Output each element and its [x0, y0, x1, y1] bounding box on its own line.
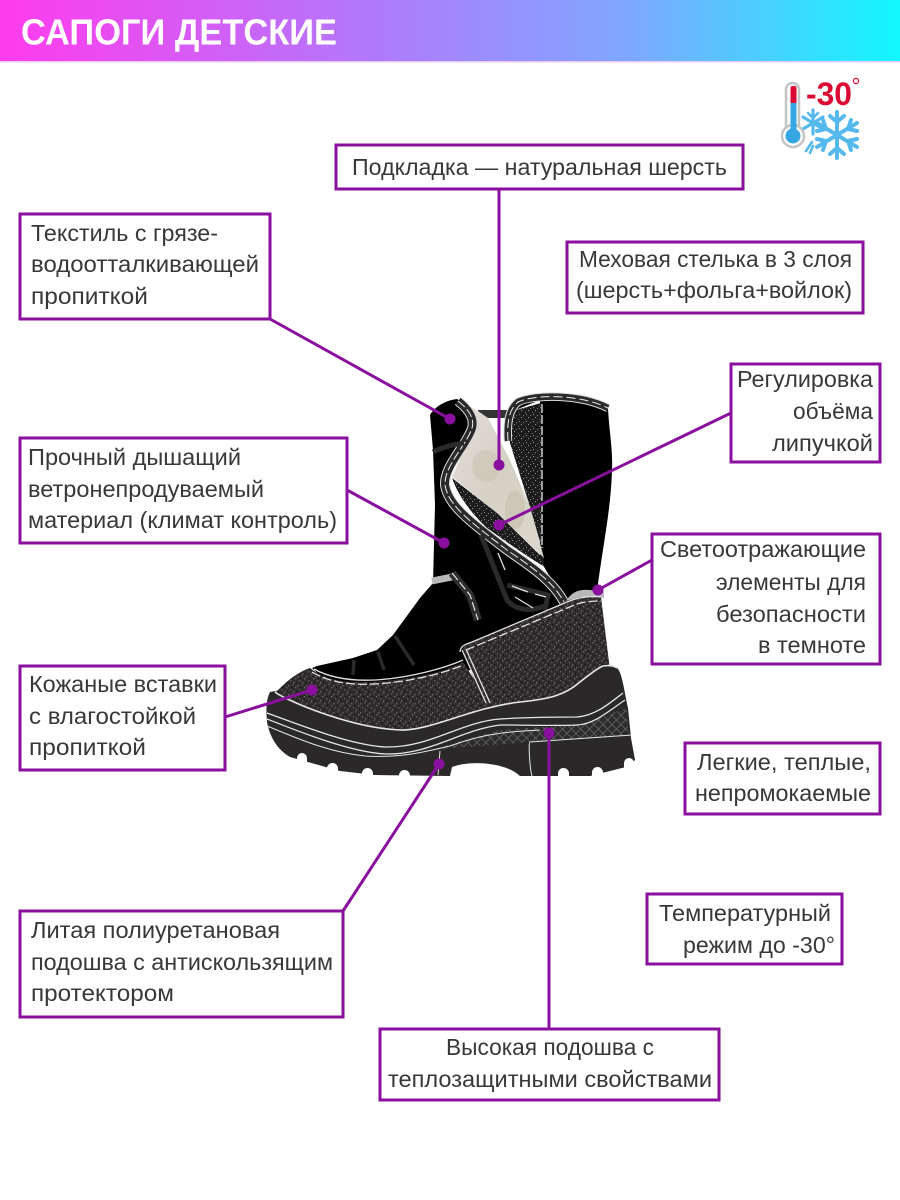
fur lining — [452, 399, 544, 558]
reflective strip left — [432, 577, 452, 581]
callout: breathable material — [20, 438, 347, 543]
callout: temperature range: режим до -30° — [683, 932, 835, 958]
callout: breathable material: Прочный дышащий — [28, 444, 241, 470]
callout: light and warm: Легкие, теплые, — [697, 749, 871, 775]
callout: reflective elements: в темноте — [758, 632, 866, 658]
callout: polyurethane sole: подошва с антискользящим — [31, 949, 333, 975]
callout: high sole: теплозащитными свойствами — [388, 1066, 712, 1092]
collar band — [478, 410, 508, 418]
callout: leather inserts — [20, 666, 225, 770]
sole mesh insert — [423, 708, 629, 752]
reflective strip right — [566, 590, 604, 601]
callout: insole: Меховая стелька в 3 слоя — [579, 246, 852, 272]
callout: light and warm: непромокаемые — [695, 780, 871, 806]
tread notches — [297, 753, 634, 784]
callout: textile: Текстиль с грязе- — [31, 220, 218, 246]
callout: temperature range: Температурный — [659, 900, 831, 926]
callout: textile — [20, 214, 270, 319]
callout: polyurethane sole: Литая полиуретановая — [31, 917, 280, 943]
header banner — [0, 0, 900, 62]
callout: velcro: Регулировка — [737, 366, 873, 392]
inner felt flap — [452, 478, 544, 566]
title: САПОГИ ДЕТСКИЕ — [21, 12, 337, 52]
temperature label: -30 — [806, 76, 852, 112]
callout: leather inserts: Кожаные вставки — [29, 671, 217, 697]
strap — [452, 573, 478, 620]
flap edge binding — [445, 401, 564, 602]
callout: temperature range — [647, 894, 842, 964]
sole highlights — [267, 666, 632, 776]
leader lines and markers — [225, 189, 731, 1029]
callout: high sole: Высокая подошва с — [446, 1034, 654, 1060]
callout: velcro: липучкой — [772, 430, 873, 456]
felt vamp — [463, 597, 610, 722]
callout: lining: Подкладка — натуральная шерсть — [352, 154, 727, 180]
boot shaft rear panel — [508, 393, 612, 604]
illustration: boot — [266, 393, 635, 784]
callout: polyurethane sole — [20, 911, 343, 1017]
felt toe — [275, 662, 490, 740]
callout: reflective elements: элементы для — [716, 569, 866, 595]
callout: reflective elements: безопасности — [716, 601, 866, 627]
thermometer — [786, 83, 799, 133]
velcro strap details — [433, 443, 548, 610]
sole — [266, 666, 635, 776]
icon: thermometer and snowflake -30 — [782, 76, 859, 158]
boot shaft front panel — [312, 399, 566, 695]
callout: textile: водоотталкивающей — [31, 251, 259, 277]
callout: breathable material: ветронепродуваемый — [28, 476, 264, 502]
snowflakes — [803, 110, 857, 158]
callout: leather inserts: с влагостойкой — [29, 703, 196, 729]
callout: reflective elements: Светоотражающие — [660, 536, 866, 562]
stitching — [312, 597, 601, 703]
rear panel binding — [508, 397, 608, 441]
callout: insole: (шерсть+фольга+войлок) — [576, 277, 852, 303]
callout: polyurethane sole: протектором — [31, 980, 174, 1006]
callout: velcro — [731, 364, 880, 462]
callout: lining — [336, 145, 743, 189]
callout: light and warm — [685, 743, 880, 814]
callout: leather inserts: пропиткой — [29, 734, 146, 760]
callout: reflective elements — [652, 534, 880, 664]
callout: velcro: объёма — [793, 398, 873, 424]
callout: textile: пропиткой — [31, 283, 148, 309]
callout: insole — [567, 242, 863, 313]
callout: breathable material: материал (климат контроль) — [28, 507, 337, 533]
inner felt right — [510, 403, 542, 549]
callout: high sole — [380, 1029, 719, 1100]
toe shaft creases — [353, 636, 414, 675]
